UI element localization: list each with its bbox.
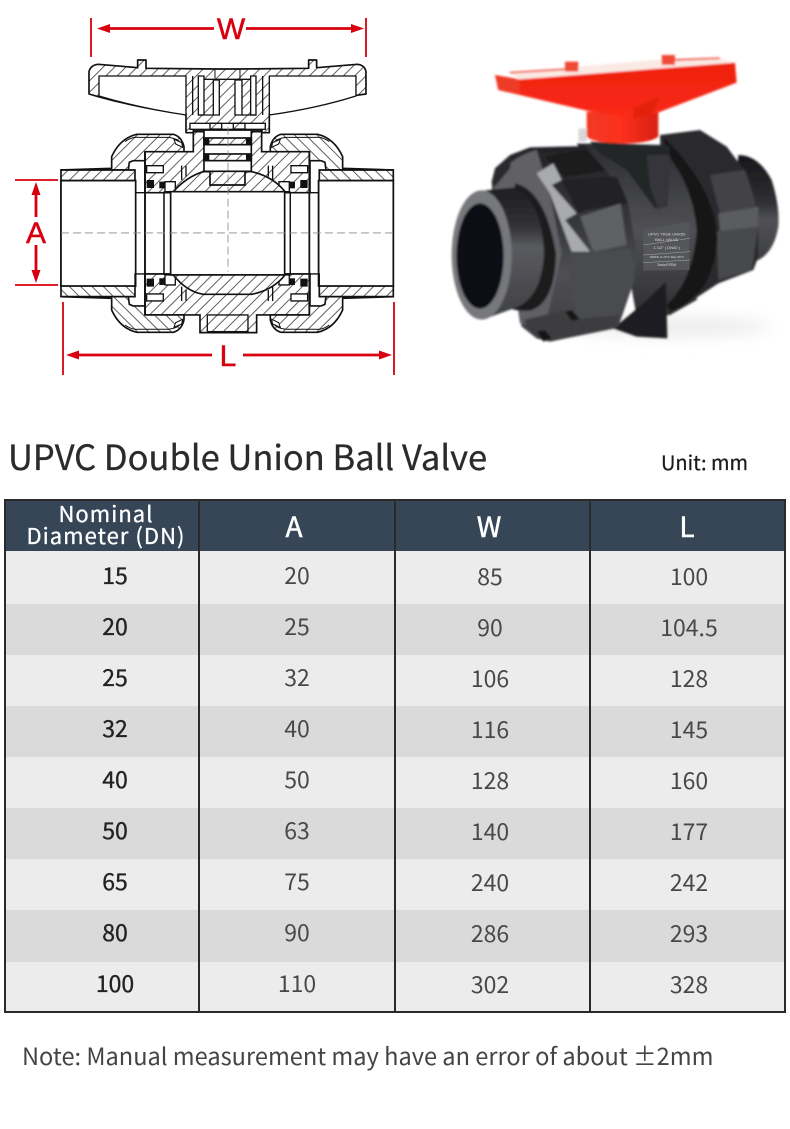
table values: 128 xyxy=(670,660,708,694)
dimension L xyxy=(63,302,394,375)
table values: 160 xyxy=(670,762,708,796)
right end pipe xyxy=(730,155,779,263)
table values: 20 xyxy=(102,608,128,642)
red handle face xyxy=(495,63,737,118)
product label: Seals:EPDM xyxy=(657,263,676,267)
table values: 85 xyxy=(477,558,503,592)
centre body xyxy=(577,143,707,317)
handle xyxy=(89,60,366,133)
dimension A xyxy=(15,180,58,285)
technical drawing: valve cross-section with dimensions xyxy=(15,13,395,375)
specification table xyxy=(4,499,786,1013)
product label: UPVC TRUE UNION xyxy=(648,231,685,236)
table values: 40 xyxy=(102,761,128,795)
dimension A: A xyxy=(26,217,46,250)
table values: 20 xyxy=(284,557,310,591)
table values: 50 xyxy=(102,812,128,846)
left nut dark top panels xyxy=(545,149,605,177)
table values: 32 xyxy=(284,659,310,693)
table values: 100 xyxy=(96,965,134,999)
product label: 150PSI at 70°C Max 80°C xyxy=(649,255,685,259)
title: UPVC Double Union Ball Valve xyxy=(8,430,487,480)
table values: 15 xyxy=(102,557,128,591)
table values: 90 xyxy=(284,914,310,948)
product label: 1 1/2" ( DN40 ) xyxy=(653,245,681,250)
table values: 240 xyxy=(471,864,509,898)
table values: 40 xyxy=(284,710,310,744)
table values: 90 xyxy=(477,609,503,643)
table values: 128 xyxy=(471,762,509,796)
product label xyxy=(643,222,690,271)
product photo: valve with red handle xyxy=(450,53,780,344)
table values: 104.5 xyxy=(660,609,718,643)
top boss of body xyxy=(590,142,670,208)
table values xyxy=(96,557,718,1000)
table values: 25 xyxy=(102,659,128,693)
product label: BALL VALVE xyxy=(655,237,679,242)
table values: 80 xyxy=(102,914,128,948)
shadow xyxy=(570,317,770,337)
table values: 75 xyxy=(284,863,310,897)
right union nut xyxy=(660,130,758,315)
black ring between body and right nut xyxy=(663,137,717,312)
left pipe xyxy=(483,187,544,319)
body hatched xyxy=(145,132,310,193)
table values: 293 xyxy=(670,915,708,949)
red handle top xyxy=(510,55,735,79)
dimension W: W xyxy=(217,13,246,46)
table values: 50 xyxy=(284,761,310,795)
table values: 106 xyxy=(471,660,509,694)
table values: 145 xyxy=(670,711,708,745)
unit label: Unit: mm xyxy=(661,447,748,476)
left union nut outline xyxy=(492,146,637,342)
centre lines xyxy=(61,127,393,272)
ball xyxy=(171,192,285,275)
header labels: A xyxy=(285,506,303,546)
header labels: W xyxy=(477,506,501,546)
note: Note: Manual measurement may have an error of about ±2mm xyxy=(22,1038,713,1072)
table values: 302 xyxy=(471,966,509,1000)
header labels: Diameter (DN) xyxy=(26,519,186,551)
header labels: L xyxy=(679,506,695,546)
left nut grey faces xyxy=(580,203,627,252)
table values: 242 xyxy=(670,864,708,898)
table values: 110 xyxy=(278,965,316,999)
table values: 116 xyxy=(471,711,509,745)
dimension W xyxy=(91,13,366,57)
table values: 25 xyxy=(284,608,310,642)
table values: 140 xyxy=(471,813,509,847)
header labels: Nominal xyxy=(58,497,154,529)
left nut grey ring face xyxy=(493,150,562,327)
left nut light chevron xyxy=(537,163,590,252)
foot xyxy=(613,282,667,338)
header labels xyxy=(26,497,695,551)
table values: 328 xyxy=(670,966,708,1000)
table values: 63 xyxy=(284,812,310,846)
table values: 32 xyxy=(102,710,128,744)
table header xyxy=(4,499,786,551)
red handle neck xyxy=(587,112,658,143)
table values: 100 xyxy=(670,558,708,592)
table values: 177 xyxy=(670,813,708,847)
left flange ring xyxy=(510,183,556,311)
dimension L: L xyxy=(220,340,236,373)
table values: 286 xyxy=(471,915,509,949)
table values: 65 xyxy=(102,863,128,897)
stem xyxy=(204,129,251,171)
